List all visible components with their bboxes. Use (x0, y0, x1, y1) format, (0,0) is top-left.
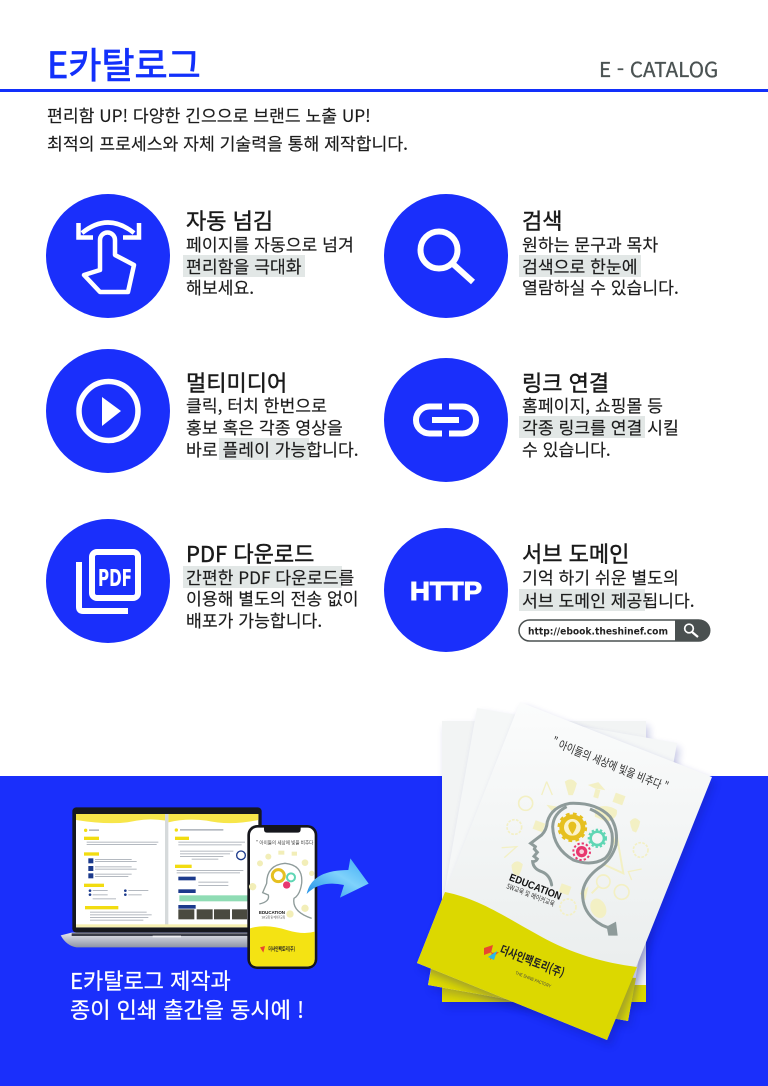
middle brochure (428, 708, 680, 1027)
title: E카탈로그 (47, 37, 201, 89)
feature: multimedia: 플레이 가능 (222, 436, 306, 461)
feature: search: 검색으로 한눈에 (522, 253, 638, 278)
feature: PDF download: 를 (339, 564, 354, 589)
feature: auto page turn: 편리함을 극대화 (186, 253, 302, 278)
feature: auto page turn: 자동 넘김 (186, 204, 273, 236)
feature: link: 링크 연결 (522, 366, 609, 398)
blue band (0, 776, 768, 1086)
feature: multimedia (186, 366, 359, 461)
feature: search (519, 204, 679, 299)
icon: multimedia play (46, 349, 170, 473)
phone (247, 825, 317, 969)
feature: auto page turn: 해보세요. (186, 274, 254, 299)
feature: link: 각종 링크를 연결 (522, 414, 642, 439)
feature: auto page turn: 페이지를 자동으로 넘겨 (186, 231, 354, 256)
intro text: 최적의 프로세스와 자체 기술력을 통해 제작합니다. (47, 130, 408, 155)
feature: search: 열람하실 수 있습니다. (522, 274, 679, 299)
feature: PDF download (183, 537, 359, 632)
bottom caption: E카탈로그 제작과 (70, 964, 231, 996)
feature: search: 검색 (522, 204, 562, 236)
feature: sub domain: 됩니다. (642, 587, 695, 612)
phone: 더사인팩토리(주) (268, 944, 295, 953)
intro text: 편리함 UP! 다양한 긴으으로 브랜드 노출 UP! (47, 102, 371, 127)
icon: link (384, 358, 508, 482)
feature: link: 시킬 (647, 414, 679, 439)
brochure and device illustration (60, 704, 716, 1046)
feature: sub domain: 서브 도메인 제공 (522, 587, 642, 612)
subtitle: E - CATALOG: E - CATALOG (599, 53, 718, 83)
feature: PDF download: PDF 다운로드 (186, 537, 314, 569)
cover slogan: " 아이들의 세상에 빛을 비추다 " (550, 734, 670, 795)
feature: multimedia: 멀티미디어 (186, 366, 287, 398)
feature: auto page turn (183, 204, 354, 299)
bottom caption: 종이 인쇄 출간을 동시에 ! (70, 992, 304, 1024)
feature: sub domain (519, 537, 695, 612)
feature: sub domain: 서브 도메인 (522, 537, 629, 569)
feature: multimedia: 홍보 혹은 각종 영상을 (186, 414, 343, 439)
feature: PDF download: 이용해 별도의 전송 없이 (186, 585, 359, 610)
arrow (307, 858, 369, 898)
icon: PDF download: PDF (98, 566, 132, 592)
url search bar (518, 619, 710, 642)
front brochure (417, 702, 715, 1046)
url search bar: http://ebook.theshinef.com (528, 626, 668, 638)
phone: " 아이들의 세상에 빛을 비추다 (256, 838, 313, 846)
feature: sub domain: 기억 하기 쉬운 별도의 (522, 564, 679, 589)
icon: HTTP (384, 528, 508, 652)
cover logo: 더사인팩토리(주) (498, 941, 567, 981)
feature: link: 수 있습니다. (522, 436, 611, 461)
feature: search: 원하는 문구과 목차 (522, 231, 658, 256)
pale icons (502, 780, 648, 920)
feature: multimedia: 바로 합니다. (186, 436, 359, 461)
icon: HTTP: HTTP (410, 576, 482, 606)
icon: PDF download (46, 519, 170, 643)
feature: link: 홈페이지, 쇼핑몰 등 (522, 392, 663, 417)
bottom caption (70, 964, 304, 1024)
cover title: EDUCATION (507, 872, 563, 903)
back brochure (442, 721, 649, 1008)
feature: multimedia: 클릭, 터치 한번으로 (186, 392, 327, 417)
intro text (47, 102, 408, 155)
icon: search (384, 194, 508, 318)
head outline and gears (531, 803, 618, 936)
icon: auto page turn (46, 194, 170, 318)
feature: PDF download: 배포가 가능합니다. (186, 607, 322, 632)
feature: PDF download: 간편한 PDF 다운로드 (186, 564, 339, 589)
header rule (0, 89, 768, 92)
feature: link (519, 366, 679, 461)
cover logo (484, 941, 567, 989)
phone: SW교육 및 메이커교육 (262, 914, 285, 919)
laptop (61, 807, 262, 947)
cover subtitle: SW교육 및 메이커교육 (505, 881, 556, 909)
phone: EDUCATION (259, 910, 286, 915)
cover logo: THE SHINE FACTORY (515, 970, 552, 989)
